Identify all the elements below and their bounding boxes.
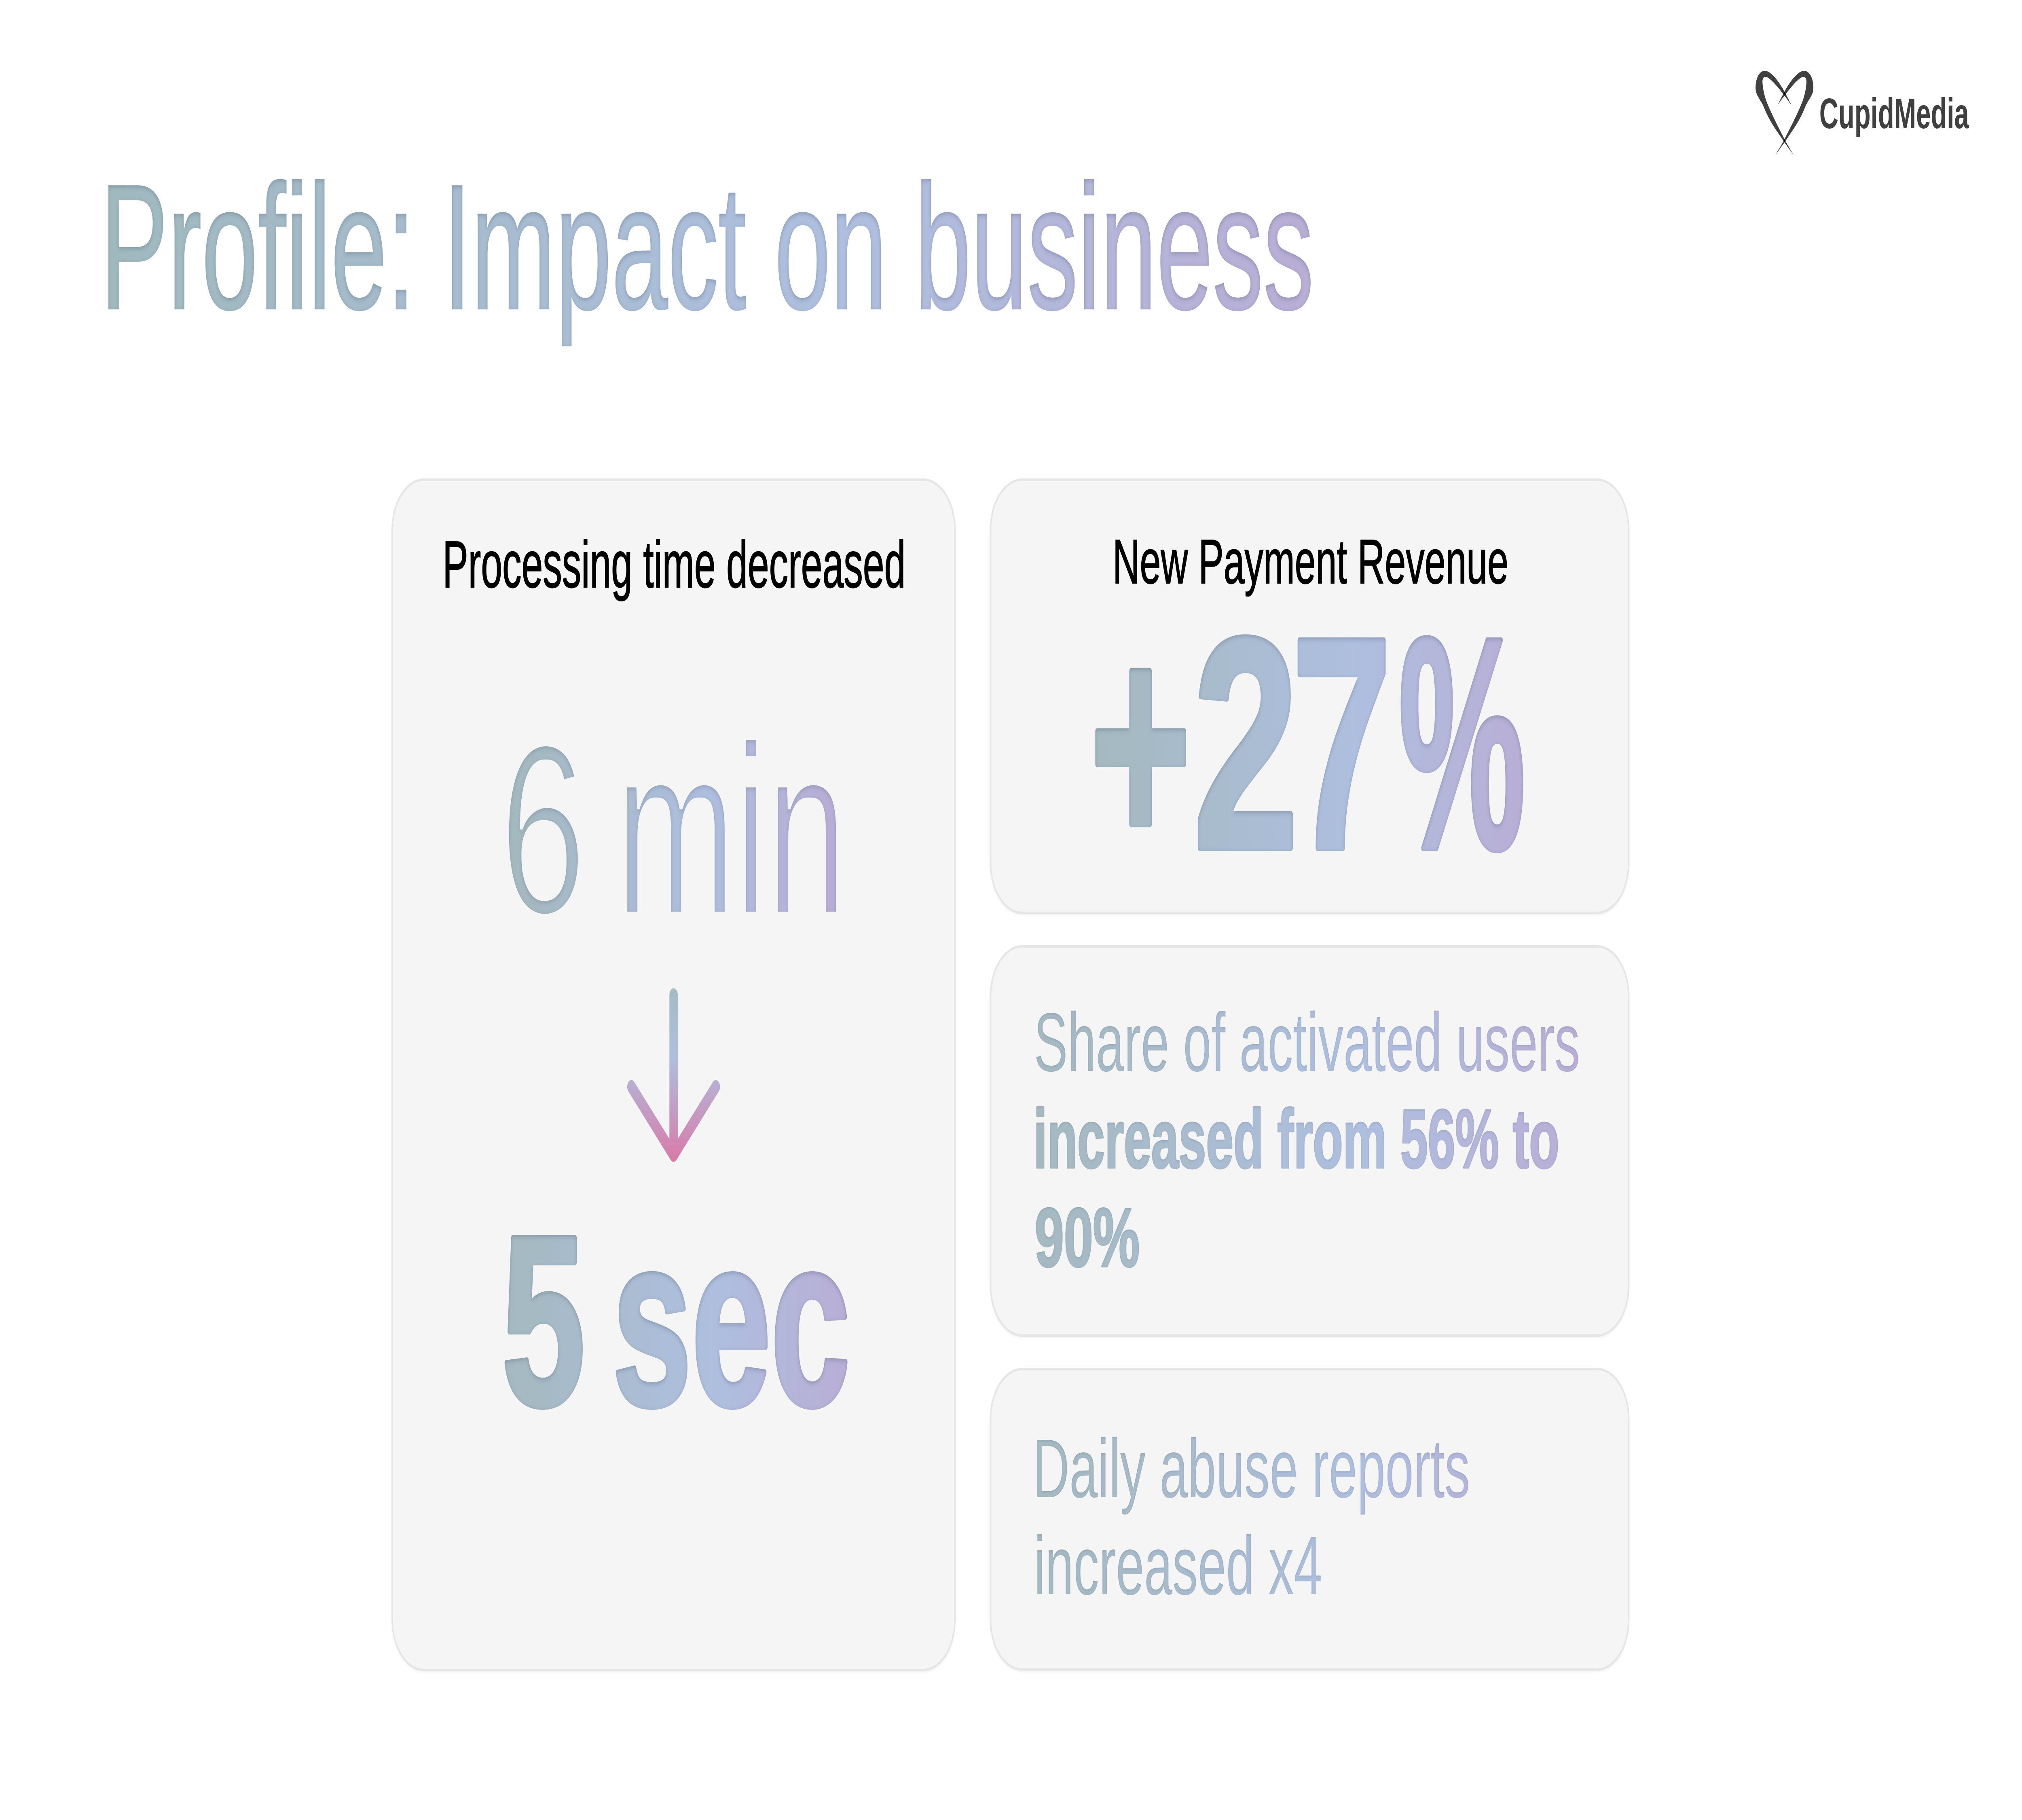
- panel: new payment revenue: [990, 480, 1629, 913]
- card background: [392, 480, 955, 1670]
- metric: revenue growth: 7: [1292, 575, 1392, 912]
- card background: [990, 480, 1629, 913]
- card background: [990, 946, 1629, 1335]
- metric: revenue growth: +: [1089, 575, 1191, 912]
- metric: after value: [502, 1185, 850, 1456]
- card heading: New Payment Revenue: [1113, 527, 1508, 597]
- metric: revenue growth: %: [1398, 575, 1526, 912]
- card heading: Processing time decreased: [442, 527, 905, 601]
- panel: processing time: [392, 480, 955, 1670]
- metric: revenue growth: [1089, 575, 1525, 912]
- text: abuse reports line 2: increased x4: [1034, 1519, 1322, 1612]
- icon: heart: [1756, 71, 1813, 155]
- text: activated users line 1: Share of activated users: [1034, 996, 1580, 1089]
- text: activated users line 3: 90%: [1035, 1191, 1140, 1284]
- metric: after value: 5: [502, 1185, 585, 1456]
- text: abuse reports line 1: Daily abuse reports: [1033, 1422, 1470, 1515]
- icon: down arrow: [631, 995, 716, 1155]
- card background: [990, 1369, 1629, 1670]
- panel: abuse reports: [990, 1369, 1629, 1670]
- metric: revenue growth: 2: [1193, 575, 1299, 912]
- metric: after value: sec: [612, 1185, 850, 1456]
- title: Profile: Impact on business: [101, 148, 1314, 347]
- text: activated users line 2: increased from 56% to: [1034, 1093, 1559, 1185]
- panel: activated users: [990, 946, 1629, 1335]
- metric: before value: 6: [500, 694, 586, 965]
- logo: CupidMedia: [1756, 71, 1969, 155]
- metric: before value: [500, 694, 846, 965]
- metric: before value: min: [616, 694, 846, 965]
- logo wordmark: CupidMedia: [1819, 89, 1969, 138]
